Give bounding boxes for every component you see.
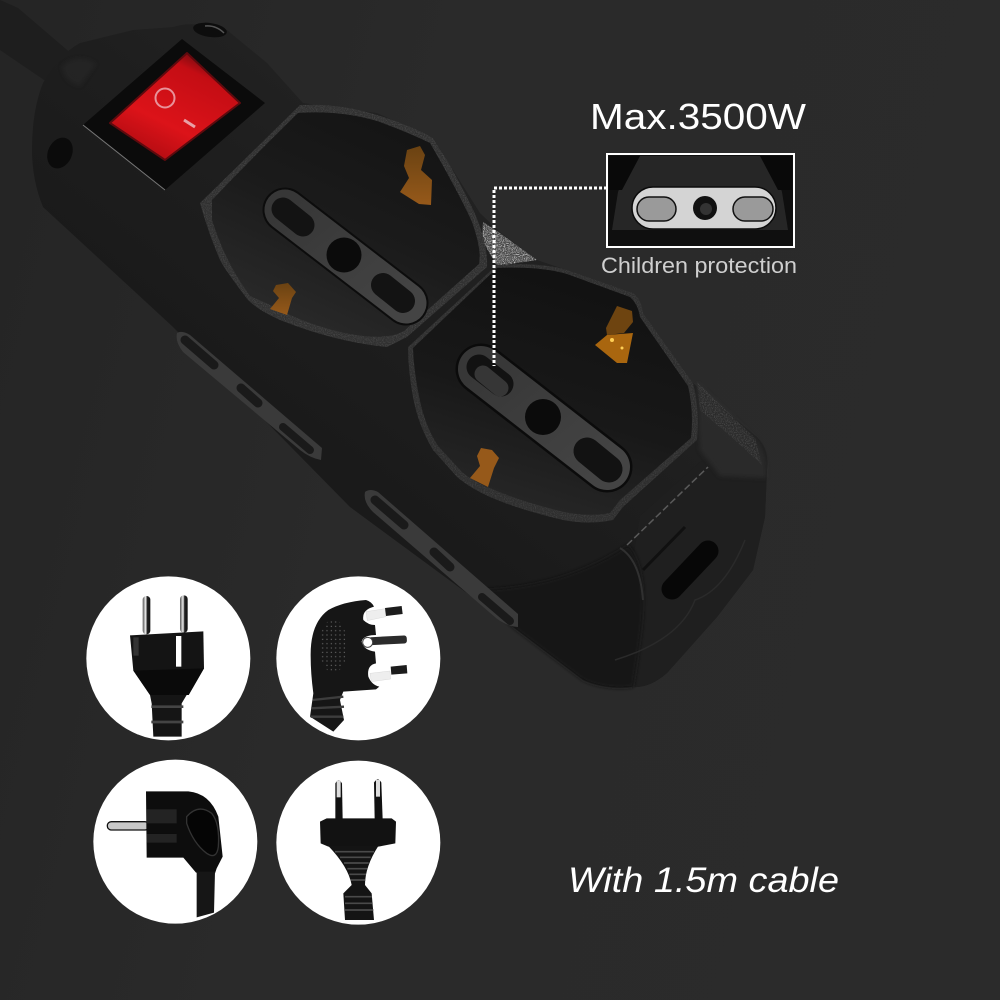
end slot — [672, 551, 708, 589]
socket 1 upper contact — [400, 146, 432, 205]
socket 2 glowing contact highlight — [595, 333, 633, 363]
circle: Schuko angled plug — [93, 760, 257, 924]
side socket strip 1 — [177, 332, 322, 460]
socket 2 lower contact — [470, 448, 499, 487]
inset: child protection shutter — [607, 154, 794, 247]
caption: With 1.5m cable: With 1.5m cable — [568, 861, 839, 900]
caption: Children protection: Children protection — [601, 253, 797, 278]
power strip product — [0, 0, 768, 688]
circle: Italian angled plug — [276, 576, 440, 740]
mounting hole top — [192, 21, 228, 39]
power cable — [0, 0, 73, 84]
circle: Schuko straight plug — [86, 576, 250, 740]
infographic canvas — [0, 0, 838, 925]
circle: Euro two-pin plug — [276, 761, 440, 925]
socket 1 lower contact — [270, 283, 296, 315]
socket 1 — [200, 105, 487, 347]
callout: dotted leader line — [494, 188, 607, 366]
socket 2 — [408, 264, 698, 522]
plug options — [86, 576, 440, 925]
socket 2 upper contact — [606, 306, 633, 335]
rocker switch — [83, 39, 265, 190]
heading: Max.3500W: Max.3500W — [590, 96, 806, 137]
side socket strip 2 — [365, 490, 518, 627]
mounting hole left — [42, 133, 78, 173]
strip body — [32, 24, 768, 688]
